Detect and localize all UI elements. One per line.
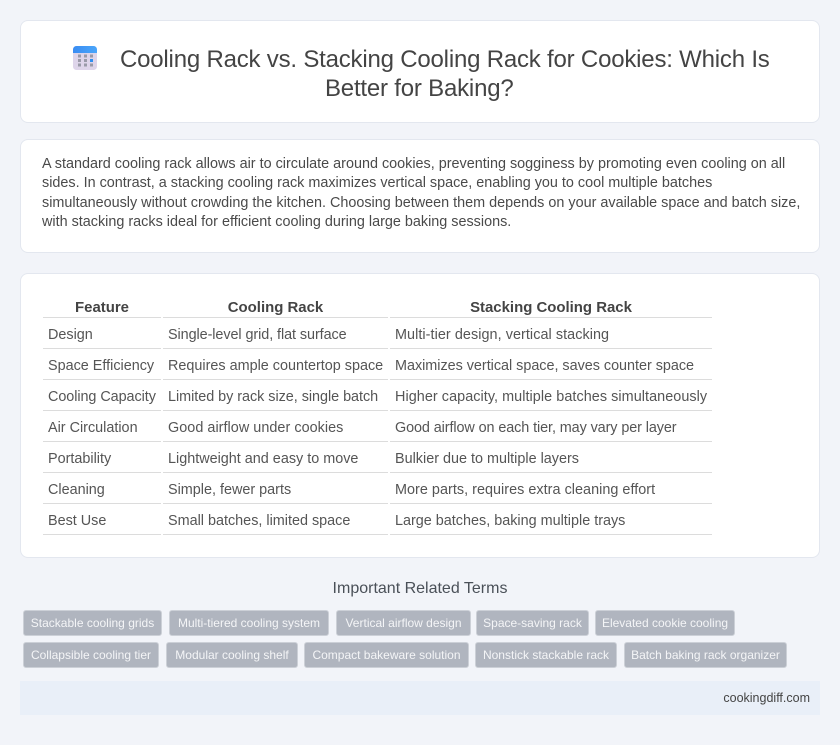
tag: Batch baking rack organizer bbox=[631, 648, 780, 662]
title bbox=[120, 46, 770, 102]
row: Design: Design bbox=[48, 327, 93, 343]
row: Cleaning: Cleaning bbox=[48, 482, 105, 498]
tag bbox=[336, 610, 471, 636]
panel: description card bbox=[20, 139, 820, 253]
row: Space Efficiency: Space Efficiency bbox=[48, 358, 154, 374]
panel: title card bbox=[20, 20, 820, 123]
row: Best Use bbox=[48, 513, 625, 529]
row: Air Circulation: Good airflow under cookies bbox=[168, 420, 343, 436]
tag bbox=[476, 610, 589, 636]
footer bar bbox=[20, 681, 820, 715]
tag: Modular cooling shelf bbox=[175, 648, 289, 662]
tag bbox=[23, 642, 159, 668]
row: Best Use: Large batches, baking multiple trays bbox=[395, 513, 625, 529]
footer text: cookingdiff.com bbox=[723, 691, 810, 705]
tag: Nonstick stackable rack bbox=[483, 648, 609, 662]
row: Cooling Capacity: Higher capacity, multiple batches simultaneously bbox=[395, 389, 707, 405]
text block: description: simultaneously without crowding the kitchen. Choosing between them depends on your available space and batch size, bbox=[42, 195, 800, 211]
row: Design bbox=[48, 327, 609, 343]
row: Best Use: Best Use bbox=[48, 513, 106, 529]
tag bbox=[304, 642, 469, 668]
header: Stacking Cooling Rack: Stacking Cooling Rack bbox=[470, 299, 632, 316]
heading: Important Related Terms: Important Related Terms bbox=[333, 580, 507, 597]
tag: Stackable cooling grids bbox=[31, 616, 154, 630]
text block: description: A standard cooling rack allows air to circulate around cookies, preventing sogginess by promoting even cooling on all bbox=[42, 156, 785, 172]
row: Space Efficiency: Requires ample countertop space bbox=[168, 358, 383, 374]
text block: description bbox=[42, 156, 800, 230]
row: Cooling Capacity bbox=[48, 389, 707, 405]
title: Better for Baking? bbox=[325, 75, 514, 102]
tag: Vertical airflow design bbox=[345, 616, 462, 630]
tag: Compact bakeware solution bbox=[312, 648, 461, 662]
row: Portability bbox=[48, 451, 579, 467]
row: Design: Multi-tier design, vertical stacking bbox=[395, 327, 609, 343]
row: Space Efficiency bbox=[48, 358, 694, 374]
row: Design: Single-level grid, flat surface bbox=[168, 327, 347, 343]
row: Space Efficiency: Maximizes vertical space, saves counter space bbox=[395, 358, 694, 374]
row: Cooling Capacity: Limited by rack size, single batch bbox=[168, 389, 378, 405]
row: Portability: Portability bbox=[48, 451, 111, 467]
row: Air Circulation bbox=[48, 420, 676, 436]
tag: Elevated cookie cooling bbox=[602, 616, 728, 630]
tag bbox=[595, 610, 735, 636]
tag: Multi-tiered cooling system bbox=[178, 616, 320, 630]
comparison table bbox=[43, 299, 712, 535]
text block: description: sides. In contrast, a stacking cooling rack maximizes vertical space, enabling you to cool multiple batches bbox=[42, 175, 712, 191]
row: Cooling Capacity: Cooling Capacity bbox=[48, 389, 156, 405]
row: Cleaning: More parts, requires extra cleaning effort bbox=[395, 482, 655, 498]
tag: Space-saving rack bbox=[483, 616, 582, 630]
tag bbox=[23, 610, 162, 636]
row: Cleaning: Simple, fewer parts bbox=[168, 482, 291, 498]
row: Air Circulation: Good airflow on each tier, may vary per layer bbox=[395, 420, 676, 436]
text block: description: with stacking racks ideal for efficient cooling during large baking sessions. bbox=[42, 214, 511, 230]
row: Portability: Lightweight and easy to move bbox=[168, 451, 358, 467]
row: Portability: Bulkier due to multiple layers bbox=[395, 451, 579, 467]
tag bbox=[169, 610, 329, 636]
tag bbox=[166, 642, 298, 668]
panel: comparison table card bbox=[20, 273, 820, 558]
tag bbox=[475, 642, 617, 668]
header: Cooling Rack: Cooling Rack bbox=[228, 299, 323, 316]
tag bbox=[624, 642, 787, 668]
header: Feature: Feature bbox=[75, 299, 129, 316]
row: Best Use: Small batches, limited space bbox=[168, 513, 350, 529]
tag: Collapsible cooling tier bbox=[31, 648, 151, 662]
icon: calendar grid rack bbox=[73, 46, 97, 70]
row: Air Circulation: Air Circulation bbox=[48, 420, 138, 436]
title: Cooling Rack vs. Stacking Cooling Rack for Cookies: Which Is bbox=[120, 46, 770, 73]
row: Cleaning bbox=[48, 482, 656, 498]
